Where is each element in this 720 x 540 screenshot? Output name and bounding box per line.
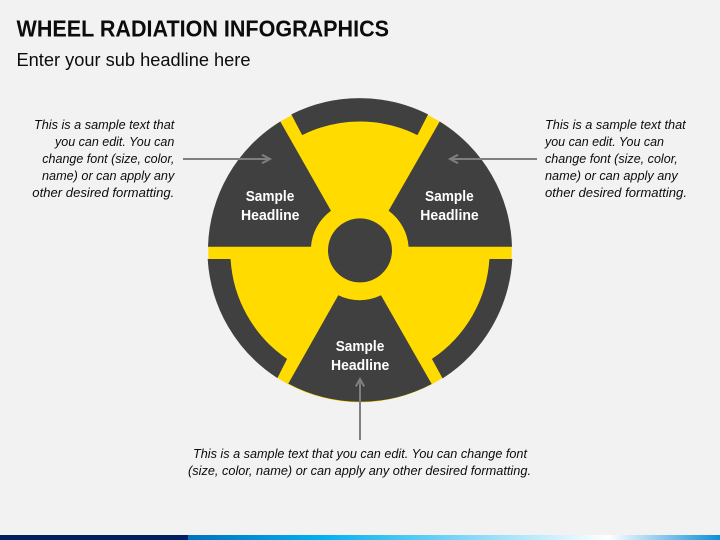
top-left wedge bbox=[208, 122, 331, 247]
text block: left: This is a sample text that bbox=[34, 118, 175, 132]
text block: bottom: This is a sample text that you can edit. You can change font bbox=[193, 447, 528, 461]
arrow: bottom bbox=[356, 379, 364, 440]
text block: left: other desired formatting. bbox=[32, 186, 174, 200]
wedge label: top left bbox=[241, 188, 300, 224]
wedge label: bottom: Sample bbox=[336, 338, 384, 355]
arrow: left bbox=[183, 155, 270, 163]
text block: right: change font (size, color, bbox=[545, 152, 678, 166]
text block: bottom bbox=[188, 447, 531, 478]
bottom-right arc band bbox=[432, 259, 512, 378]
radiation wheel bbox=[208, 98, 512, 402]
bottom-left arc band bbox=[208, 259, 287, 378]
wedge label: bottom bbox=[331, 338, 389, 374]
text block: left bbox=[32, 118, 175, 200]
sub headline: Enter your sub headline here bbox=[16, 50, 250, 70]
text block: left: change font (size, color, bbox=[42, 152, 174, 166]
top arc band bbox=[292, 98, 428, 135]
wedge label: top right: Sample bbox=[425, 188, 474, 205]
text block: right: This is a sample text that bbox=[545, 118, 686, 132]
footer bar bbox=[0, 535, 720, 540]
title: WHEEL RADIATION INFOGRAPHICS bbox=[16, 16, 389, 42]
bottom wedge bbox=[288, 295, 432, 402]
wedge label: top right bbox=[420, 188, 479, 224]
text block: right: you can edit. You can bbox=[544, 135, 664, 149]
top-right wedge bbox=[389, 122, 512, 247]
text block: left: you can edit. You can bbox=[54, 135, 174, 149]
text block: right: other desired formatting. bbox=[545, 186, 687, 200]
text block: right: name) or can apply any bbox=[545, 169, 678, 183]
yellow disc bbox=[208, 99, 512, 402]
wedge label: bottom: Headline bbox=[331, 357, 389, 374]
wedge label: top right: Headline bbox=[420, 207, 479, 224]
wedge label: top left: Headline bbox=[241, 207, 300, 224]
text block: bottom: (size, color, name) or can apply any other desired formatting. bbox=[188, 464, 531, 478]
wedge label: top left: Sample bbox=[246, 188, 294, 205]
arrow: right bbox=[450, 155, 537, 163]
center circle bbox=[328, 218, 392, 282]
text block: left: name) or can apply any bbox=[42, 169, 175, 183]
text block: right bbox=[544, 118, 687, 200]
